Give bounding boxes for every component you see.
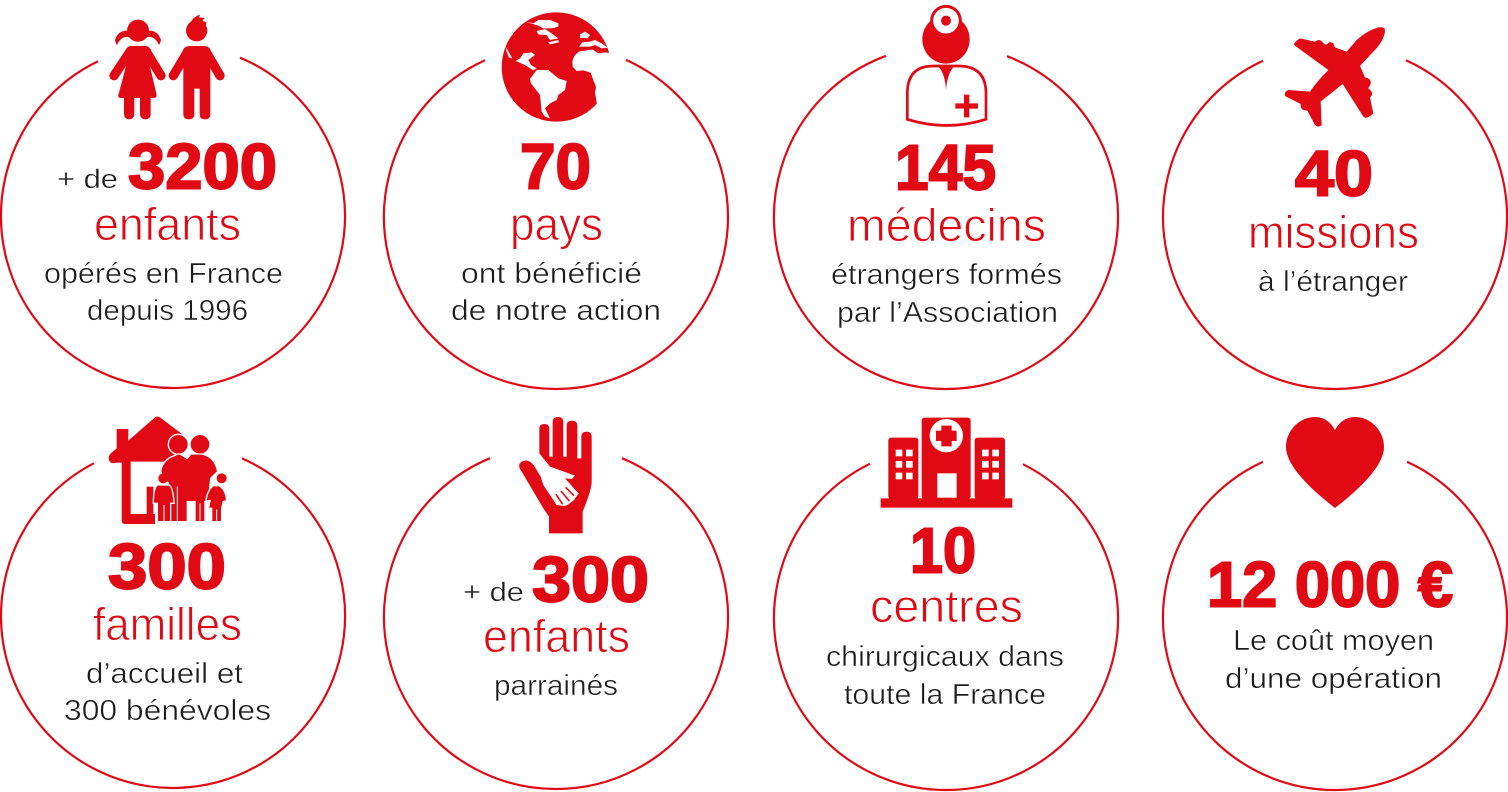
figure: 40 <box>1295 138 1373 210</box>
figure: 12 000 € <box>1207 548 1453 620</box>
circle outline <box>1163 462 1507 790</box>
label: enfants <box>94 198 241 250</box>
label: centres <box>870 580 1023 632</box>
panel: 10 centres <box>774 418 1118 790</box>
description: d’une opération <box>1225 663 1442 695</box>
label: familles <box>93 598 242 650</box>
description: étrangers formés <box>831 259 1062 291</box>
icon: doctor <box>907 6 986 125</box>
description: par l’Association <box>837 297 1058 329</box>
figure: 70 <box>520 130 591 202</box>
description: d’accueil et <box>86 658 243 690</box>
description: chirurgicaux dans <box>826 641 1064 673</box>
prefix: + de <box>57 164 118 194</box>
figure: 300 <box>108 530 226 602</box>
panel: 145 médecins <box>774 6 1118 389</box>
figure: 10 <box>910 514 976 586</box>
description <box>1225 625 1442 695</box>
description <box>826 641 1064 711</box>
description <box>44 258 283 327</box>
figure: 300 <box>532 544 649 616</box>
icon: heart <box>1286 417 1384 508</box>
panel: 300 familles <box>1 417 345 788</box>
figure: 3200 <box>128 130 277 202</box>
circle outline <box>384 60 728 389</box>
description: 300 bénévoles <box>64 695 271 727</box>
icon: family and house <box>109 417 227 524</box>
circle outline <box>384 458 728 789</box>
icon: hospital <box>881 418 1012 508</box>
description <box>64 658 271 727</box>
label: enfants <box>483 610 630 662</box>
panel: 300 enfants parrainés <box>384 417 728 789</box>
panel: 3200 enfants <box>1 15 345 388</box>
description: depuis 1996 <box>87 295 248 327</box>
panel: 40 missions <box>1163 27 1507 389</box>
description: parrainés <box>494 670 618 702</box>
description: ont bénéficié <box>461 258 642 290</box>
icon: airplane <box>1285 27 1385 127</box>
circle outline <box>1 458 345 788</box>
description <box>451 258 661 327</box>
description: toute la France <box>844 679 1046 711</box>
description: à l’étranger <box>1258 266 1408 298</box>
panel: 70 pays <box>384 12 728 389</box>
icon: children <box>114 15 220 119</box>
label: médecins <box>847 199 1046 251</box>
description <box>831 259 1062 329</box>
icon: helping hand <box>519 417 592 533</box>
panel: 12 000 euros <box>1163 417 1507 790</box>
circle outline <box>774 464 1118 790</box>
prefix: + de <box>463 577 524 607</box>
circle outline <box>1 58 345 388</box>
circle outline <box>1163 60 1507 389</box>
figure: 145 <box>895 132 996 204</box>
description: opérés en France <box>44 258 283 290</box>
description: de notre action <box>451 295 661 327</box>
label: pays <box>510 198 603 250</box>
label: missions <box>1248 206 1419 258</box>
description: Le coût moyen <box>1233 625 1434 657</box>
icon: globe <box>502 12 615 122</box>
circle outline <box>774 56 1118 389</box>
